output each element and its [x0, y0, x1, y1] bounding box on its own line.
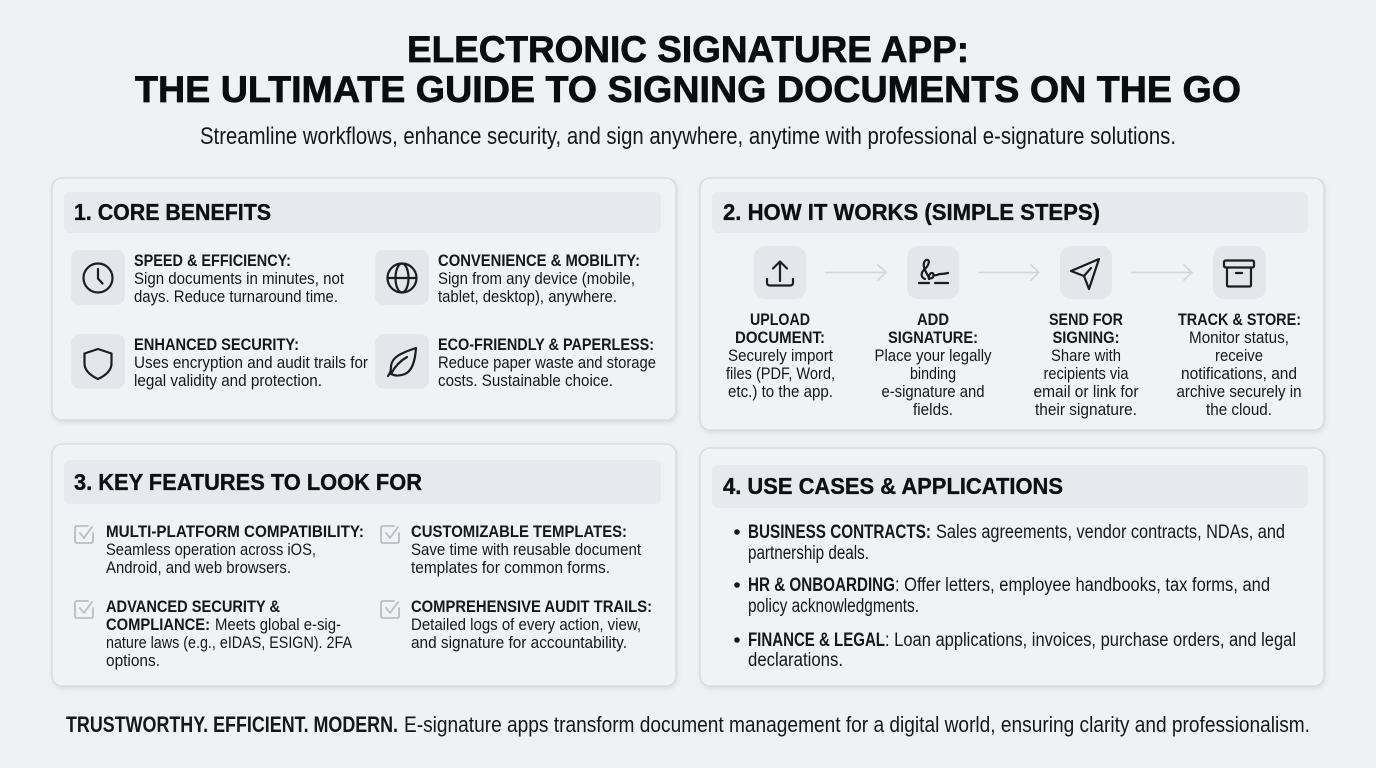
benefit: enhanced security: legal validity and protection.: [134, 371, 322, 390]
panel: core benefits: [52, 178, 676, 420]
heading: core benefits: [64, 192, 661, 233]
step: send for signing: Share with: [1051, 346, 1121, 365]
step: upload document: UPLOAD: [750, 310, 810, 329]
arrow: upload to signature: [826, 265, 886, 280]
step: send for signing: [1034, 246, 1139, 419]
title: THE ULTIMATE GUIDE TO SIGNING DOCUMENTS ON THE GO: [135, 69, 1241, 110]
use case: business contracts: Sales agreements, vendor contracts, NDAs, and: [936, 522, 1285, 543]
footer tagline: [66, 712, 1310, 737]
benefit: convenience and mobility: tablet, desktop), anywhere.: [438, 287, 617, 306]
use case: business contracts: [734, 522, 1285, 564]
use case: hr and onboarding: : Offer letters, employee handbooks, tax forms, and: [895, 575, 1270, 596]
panel: key features: [52, 444, 676, 686]
feature: customizable templates: [381, 522, 641, 577]
step: send for signing: email or link for: [1034, 382, 1139, 401]
feature: multi-platform compatibility: MULTI-PLATFORM COMPATIBILITY:: [106, 522, 364, 541]
step: add signature: SIGNATURE:: [888, 328, 978, 347]
step: upload document: files (PDF, Word,: [726, 364, 835, 383]
step: add signature: e-signature and: [882, 382, 984, 401]
benefit: eco-friendly and paperless: ECO-FRIENDLY & PAPERLESS:: [438, 335, 654, 354]
step: upload document: [726, 246, 835, 401]
benefit: enhanced security: Uses encryption and audit trails for: [134, 353, 368, 372]
benefit: speed and efficiency: Sign documents in minutes, not: [134, 269, 344, 288]
use case: finance and legal: [734, 630, 1296, 671]
use case: finance and legal: FINANCE & LEGAL: [748, 630, 885, 651]
benefit: convenience and mobility: Sign from any device (mobile,: [438, 269, 635, 288]
feature: comprehensive audit trails: Detailed logs of every action, view,: [411, 615, 641, 634]
arrow: send to track: [1132, 265, 1192, 280]
step: send for signing: SIGNING:: [1052, 328, 1120, 347]
use case: hr and onboarding: HR & ONBOARDING: [748, 575, 895, 596]
feature: comprehensive audit trails: and signature for accountability.: [411, 633, 627, 652]
heading: key features: 3. KEY FEATURES TO LOOK FOR: [74, 469, 422, 495]
step: track and store: archive securely in: [1176, 382, 1302, 401]
step: send for signing: their signature.: [1035, 400, 1137, 419]
heading: use cases: [712, 465, 1308, 508]
step: track and store: Monitor status,: [1189, 328, 1289, 347]
benefit: speed and efficiency: days. Reduce turnaround time.: [134, 287, 338, 306]
heading: how it works: 2. HOW IT WORKS (SIMPLE STEPS): [723, 199, 1100, 225]
feature: advanced security and compliance: nature laws (e.g., eIDAS, ESIGN). 2FA: [106, 633, 353, 652]
title: ELECTRONIC SIGNATURE APP:: [407, 29, 969, 70]
feature: comprehensive audit trails: [381, 597, 652, 652]
subtitle: Streamline workflows, enhance security, and sign anywhere, anytime with professional e-signature solutions.: [200, 123, 1176, 150]
benefit: eco-friendly and paperless: Reduce paper waste and storage: [438, 353, 656, 372]
feature: customizable templates: templates for common forms.: [411, 558, 610, 577]
step: track and store: the cloud.: [1206, 400, 1272, 419]
panel: how it works: [700, 178, 1324, 430]
feature: customizable templates: Save time with reusable document: [411, 540, 641, 559]
step: add signature: [874, 246, 992, 419]
heading: key features: [64, 460, 661, 504]
use case: business contracts: BUSINESS CONTRACTS:: [748, 522, 931, 543]
benefit: speed and efficiency: [71, 250, 344, 306]
benefit: enhanced security: [71, 334, 368, 390]
use case: finance and legal: declarations.: [748, 650, 843, 671]
benefit: speed and efficiency: SPEED & EFFICIENCY:: [134, 251, 291, 270]
footer tagline: TRUSTWORTHY. EFFICIENT. MODERN.: [66, 712, 398, 737]
arrow: signature to send: [979, 265, 1039, 280]
feature: multi-platform compatibility: Seamless operation across iOS,: [106, 540, 316, 559]
step: add signature: fields.: [913, 400, 953, 419]
use case: hr and onboarding: policy acknowledgments.: [748, 596, 919, 617]
feature: advanced security and compliance: options.: [106, 651, 160, 670]
benefit: convenience and mobility: CONVENIENCE & MOBILITY:: [438, 251, 640, 270]
heading: how it works: [712, 192, 1308, 233]
step: upload document: DOCUMENT:: [735, 328, 825, 347]
step: track and store: receive: [1215, 346, 1263, 365]
step: send for signing: recipients via: [1044, 364, 1129, 383]
feature: advanced security and compliance: Meets global e-sig-: [215, 615, 341, 634]
step: send for signing: SEND FOR: [1049, 310, 1123, 329]
step: add signature: Place your legally: [874, 346, 992, 365]
heading: core benefits: 1. CORE BENEFITS: [74, 199, 271, 225]
feature: customizable templates: CUSTOMIZABLE TEMPLATES:: [411, 522, 627, 541]
use case: finance and legal: : Loan applications, invoices, purchase orders, and legal: [885, 630, 1296, 651]
step: track and store: [1176, 246, 1302, 419]
use case: business contracts: partnership deals.: [748, 543, 869, 564]
step: add signature: binding: [910, 364, 956, 383]
feature: comprehensive audit trails: COMPREHENSIVE AUDIT TRAILS:: [411, 597, 652, 616]
use case: hr and onboarding: [734, 575, 1270, 617]
title: [135, 29, 1241, 110]
benefit: convenience and mobility: [375, 250, 640, 306]
benefit: enhanced security: ENHANCED SECURITY:: [134, 335, 299, 354]
feature: advanced security and compliance: COMPLIANCE:: [106, 615, 210, 634]
feature: advanced security and compliance: ADVANCED SECURITY &: [106, 597, 280, 616]
feature: advanced security and compliance: [75, 597, 353, 670]
step: upload document: etc.) to the app.: [728, 382, 833, 401]
step: upload document: Securely import: [728, 346, 833, 365]
feature: multi-platform compatibility: [75, 522, 364, 577]
step: track and store: notifications, and: [1181, 364, 1297, 383]
benefit: eco-friendly and paperless: costs. Sustainable choice.: [438, 371, 613, 390]
benefit: eco-friendly and paperless: [375, 334, 656, 390]
panel: use cases: [700, 448, 1324, 686]
step: track and store: TRACK & STORE:: [1178, 310, 1301, 329]
heading: use cases: 4. USE CASES & APPLICATIONS: [723, 473, 1063, 499]
feature: multi-platform compatibility: Android, and web browsers.: [106, 558, 291, 577]
step: add signature: ADD: [917, 310, 949, 329]
